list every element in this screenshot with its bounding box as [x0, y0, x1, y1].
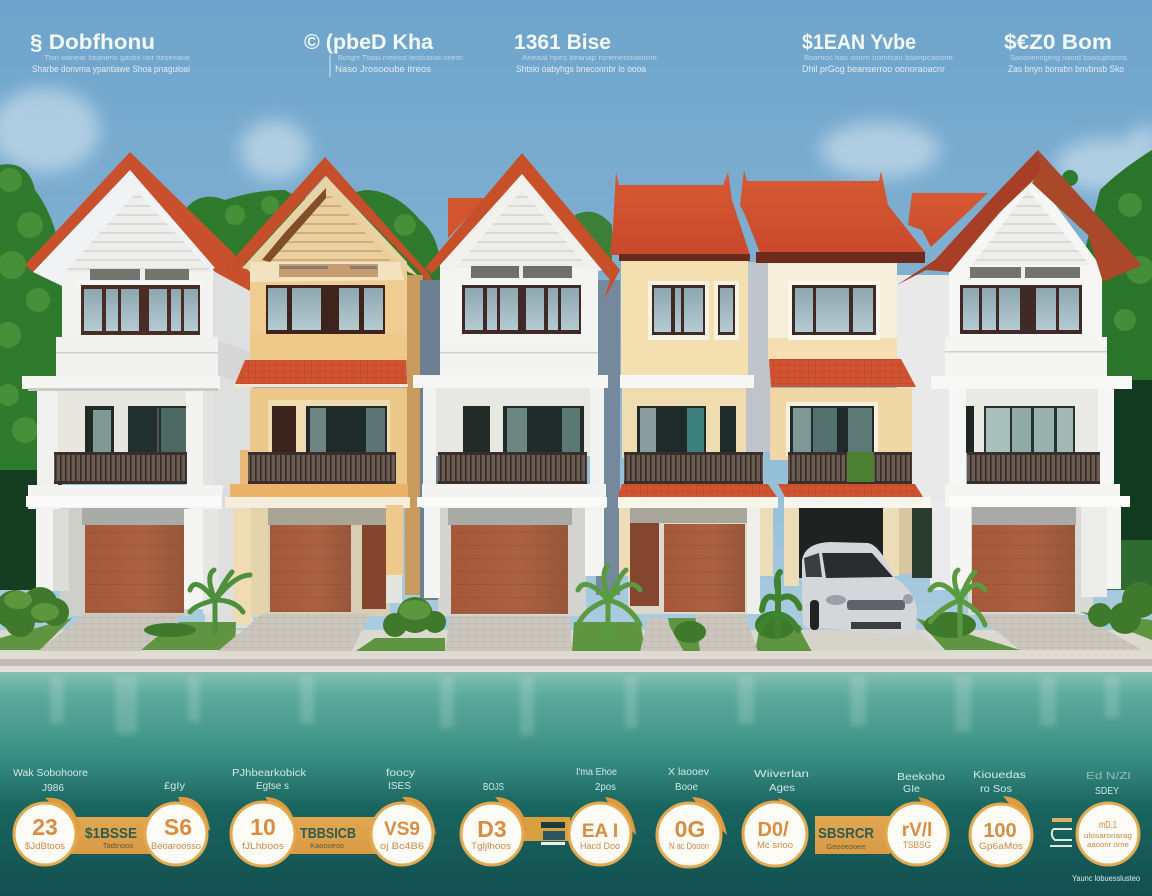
header stat 3: 1361 Bise [514, 31, 611, 54]
icon: stacked badge [541, 822, 565, 845]
label group 3: 2pos [595, 782, 616, 793]
header stat 5: Zas bnyn bonsbn bnvbnsb Sko [1008, 64, 1124, 74]
label group 3: BOJS [483, 782, 504, 793]
carport wall [968, 507, 1093, 615]
connector bar 1 [70, 817, 155, 854]
lower pillars [950, 507, 971, 589]
balcony plant [847, 452, 874, 482]
second floor windows [961, 406, 974, 453]
palm 1 [190, 570, 250, 632]
side wall [897, 275, 951, 500]
blue shadow gap [420, 280, 442, 600]
label group 4: Wiiverlan [754, 769, 809, 780]
wall [768, 258, 897, 340]
wheel [810, 600, 819, 630]
gable siding [65, 190, 212, 272]
badge 8 [743, 798, 808, 866]
badge 6: Hacd Doo [580, 841, 620, 851]
badge 1: 23 [32, 814, 58, 840]
lower pillars [424, 508, 440, 598]
balcony [967, 452, 1100, 483]
header stat 2: Naso Jrosooube itreos [335, 64, 432, 74]
header stat 1 [30, 31, 190, 74]
tan band [250, 335, 407, 359]
water pool [0, 672, 1152, 896]
header stat 1: Sharbe donvma ypantiawe Shoa pnaguloal [32, 64, 190, 74]
header stat 4: Bsamoc has osnrn nomtsan bsonpcaoone [804, 55, 953, 62]
carport wall [628, 508, 750, 614]
badge 10: Gp6aMos [979, 841, 1024, 851]
badge 11: ulosaronarag [1084, 831, 1132, 840]
dormer [448, 198, 486, 238]
garage door [85, 525, 184, 613]
label group 4: Kiouedas [973, 770, 1026, 781]
pillars [423, 388, 436, 490]
badge 10: 100 [983, 820, 1017, 842]
second floor wall [622, 388, 746, 458]
lower pillars [619, 508, 630, 576]
red gable roof [225, 157, 438, 300]
car [802, 542, 917, 636]
label group 3: X laooev [668, 767, 709, 778]
window trim [648, 281, 709, 340]
badge 2: S6 [164, 814, 192, 840]
badge 3 [231, 797, 298, 866]
red gable roof [25, 152, 252, 292]
balcony [438, 452, 587, 483]
red gable roof [425, 153, 620, 300]
label group 3: Booe [675, 782, 698, 793]
label group 2 [232, 768, 415, 792]
palm 4 [930, 570, 985, 635]
badge 10 [970, 796, 1032, 866]
footer note: Yaunc lobuesslusteo [1072, 874, 1141, 883]
label group 1 [13, 768, 185, 794]
water reflections [50, 676, 1119, 736]
second floor window [306, 406, 387, 453]
carport [799, 508, 883, 578]
window trim [788, 281, 880, 340]
upper window slit [471, 266, 572, 278]
ground: driveways and lawns [0, 612, 1152, 654]
house 3 white [413, 153, 620, 616]
label group 4: SDEY [1095, 786, 1119, 797]
connector bar 3 [520, 817, 570, 845]
header stat 2: © (pbeD Kha [304, 31, 433, 54]
second floor door [85, 406, 114, 453]
carport wall [250, 508, 390, 616]
badge 9: rV/l [902, 820, 932, 841]
balcony [788, 452, 912, 483]
mid tree mass [185, 190, 441, 290]
headlights [826, 595, 846, 605]
second floor wall [966, 389, 1098, 454]
badge 3: fJLhboos [242, 841, 285, 851]
upper window slit [970, 267, 1080, 278]
upper window [960, 285, 1082, 334]
second floor wall [58, 391, 188, 456]
upper window [266, 285, 385, 334]
label group 4: ro Sos [980, 784, 1012, 795]
garage door [972, 525, 1075, 612]
clouds [0, 88, 1152, 191]
header stat 4 [802, 31, 953, 74]
header stat 3: Shtsio oabyhgs bneconnbr lo oooa [516, 64, 646, 74]
garage door [270, 525, 351, 612]
label group 2: ISES [388, 781, 411, 792]
label group 4 [754, 769, 1131, 797]
label group 1: J986 [42, 783, 64, 794]
connector bar 4 [815, 816, 890, 854]
badge 9: TSBSG [903, 840, 931, 850]
driveways [38, 614, 184, 651]
badge 11: mD,1 [1099, 820, 1117, 831]
badge 11: aaoonr orne [1087, 840, 1129, 849]
side wall [205, 268, 253, 628]
label group 4: GIe [903, 784, 920, 795]
second floor windows [637, 406, 706, 453]
side wall [405, 275, 423, 595]
label group 2: foocy [386, 768, 415, 779]
badge 5: D3 [477, 816, 507, 842]
gable shadow [262, 183, 326, 262]
connector bar 1: $1BSSE [85, 825, 137, 842]
label group 4: Ages [769, 783, 795, 794]
bay band [945, 337, 1107, 377]
small roof lower [778, 484, 923, 497]
cornice [22, 376, 220, 389]
lawns [0, 618, 72, 650]
header stat 4: $1EAN Yvbe [802, 31, 916, 54]
house 5 cream [740, 170, 932, 586]
garage door [664, 524, 745, 612]
badge 7: N ac Dooon [669, 841, 709, 851]
bay band [56, 337, 218, 376]
cornice [931, 376, 1132, 389]
label group 2: PJhbearkobick [232, 768, 307, 779]
cornice [620, 375, 754, 388]
hip roof [610, 172, 750, 255]
badge 11 [1077, 803, 1139, 865]
header stat 3: Aneaat hpes beanap roneneomanone [522, 55, 657, 62]
upper window [462, 285, 581, 334]
badge 4: VS9 [384, 819, 420, 840]
header stat 2 [304, 31, 463, 77]
tan ledge [230, 484, 408, 497]
second floor window [503, 406, 584, 453]
house 2 tan [225, 157, 438, 625]
badge 2: Beoaroosso [151, 841, 201, 851]
balcony [624, 452, 763, 483]
label group 4: Ed N/ZI [1086, 771, 1131, 782]
side door [362, 525, 386, 609]
window [792, 285, 876, 335]
lower cornice [422, 484, 606, 508]
header stat 5: Saoonenngeng nanrd bsooupnsnns [1010, 55, 1128, 62]
second floor wall [770, 388, 912, 460]
gable roof right [1032, 150, 1142, 282]
dormer roof [908, 193, 988, 247]
badge 9 [886, 797, 950, 865]
entry door [630, 523, 659, 606]
connector bar 2 [290, 817, 380, 854]
header stat 3 [514, 31, 657, 74]
badge 5 [461, 797, 530, 865]
badge 6: EA I [582, 821, 618, 842]
badge 1: $JdBtoos [25, 841, 66, 851]
bay band [440, 337, 598, 375]
label group 2: Egtse s [256, 781, 289, 792]
badge 5: Tgljlhoos [471, 841, 512, 851]
carport wall [438, 508, 586, 616]
balcony [240, 450, 249, 485]
badge 8: Mc srioo [757, 840, 793, 850]
connector bar 4: Geooeooee [826, 842, 866, 851]
house 6 white [897, 150, 1142, 615]
grille [847, 600, 905, 610]
shadow wall between houses 4 and 5 [745, 262, 771, 452]
sky background [0, 0, 1152, 680]
lower pillars [784, 508, 799, 586]
header stat 4: Dhil prGog beanserroo oonoraoacnr [802, 64, 945, 74]
pillars [949, 389, 966, 489]
house 4 cream [610, 172, 778, 614]
bushes and palms [0, 566, 1152, 643]
window A [652, 285, 705, 335]
house 1 white [22, 152, 253, 628]
wall [621, 258, 748, 378]
trees: background foliage [0, 150, 1152, 590]
lower cornice [28, 485, 223, 509]
badge 1 [14, 798, 80, 865]
label group 1: Wak Sobohoore [13, 768, 88, 779]
windshield [822, 553, 893, 578]
badge 7: 0G [675, 816, 705, 842]
gable siding [264, 190, 392, 262]
lower pillars [36, 509, 53, 591]
badge 4: oj Bc4B6 [380, 841, 424, 851]
second floor door [463, 406, 490, 453]
gable siding [455, 190, 590, 268]
label group 1: £gIy [164, 781, 185, 792]
hip roof [740, 170, 925, 258]
right tree mass [1085, 150, 1152, 590]
carport wall [60, 508, 190, 616]
header stat 1: Thin wanear beanens ganse nor neseeane [44, 55, 190, 62]
lower cornice [945, 484, 1120, 507]
badge 7 [657, 797, 727, 867]
connector bar 2: TBBSICB [300, 825, 356, 842]
second floor window [128, 406, 188, 453]
gable siding [972, 190, 1090, 265]
label group 3: I'ma Ehoe [576, 767, 617, 778]
header stat 1: § Dobfhonu [30, 31, 155, 54]
garage door [451, 525, 568, 614]
label group 3 [483, 767, 709, 793]
left tree mass [0, 164, 64, 590]
palm 3 [760, 572, 800, 636]
second floor wall [250, 388, 407, 488]
gable roof left [897, 150, 1042, 285]
badge 8: D0/ [757, 819, 789, 841]
icon: stacked lines [1050, 820, 1072, 846]
upper window [81, 285, 200, 335]
header stat 5: $€Z0 Bom [1004, 31, 1112, 54]
second floor window [790, 406, 874, 453]
small roof [769, 359, 916, 387]
pillars [37, 391, 58, 491]
badge 3: 10 [250, 814, 276, 840]
connector bar 1: Tadtnoos [103, 841, 133, 850]
label group 4: Beekoho [897, 772, 946, 783]
connector bar 4: SBSRCR [818, 825, 874, 842]
badge 6 [569, 797, 636, 865]
small roof [618, 484, 777, 497]
palm 2 [578, 566, 640, 638]
lower pillars [233, 509, 251, 625]
upper window slit [90, 269, 189, 280]
cornice [413, 375, 608, 388]
header stat 5 [1004, 31, 1128, 74]
upper window slit [279, 264, 378, 277]
badge 4 [371, 797, 436, 865]
balcony [54, 452, 187, 483]
second floor wall [436, 388, 591, 456]
small roof [235, 360, 407, 384]
header stat 2: Bongre Thaas rnewsot lenstcanan oneon [338, 55, 463, 62]
second floor door [272, 406, 296, 453]
connector bar 2: Kaooueos [310, 841, 344, 850]
window B [718, 285, 735, 335]
road and pool edge [0, 651, 1152, 672]
badge 2 [145, 797, 210, 865]
